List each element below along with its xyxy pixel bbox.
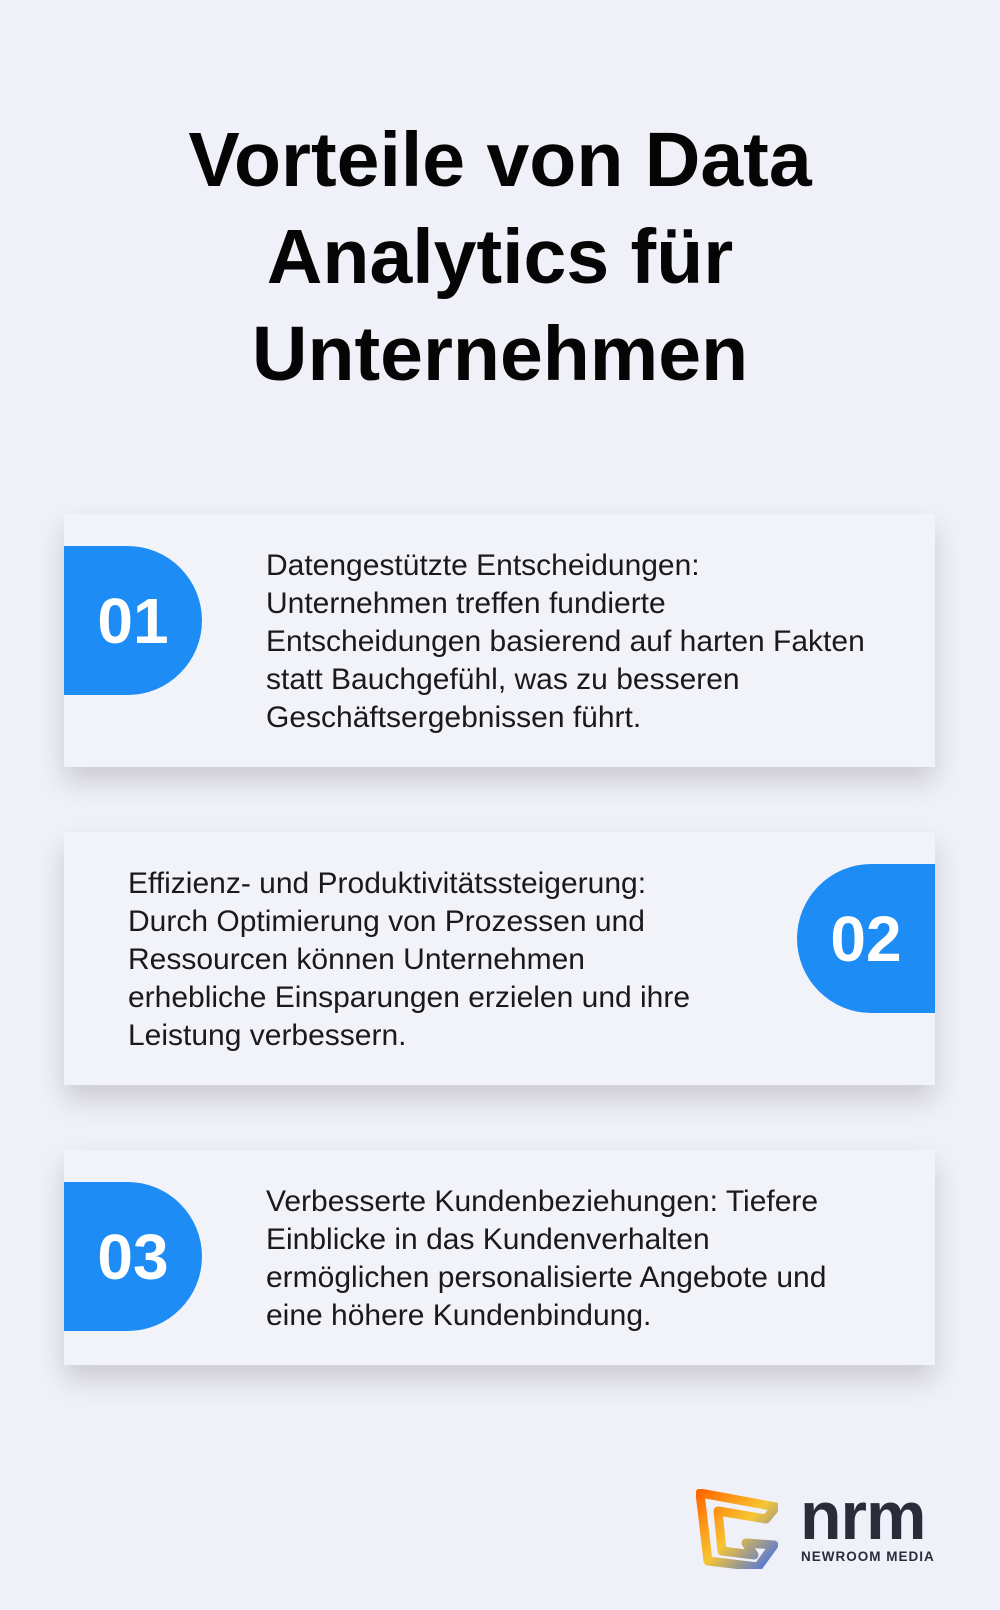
- text 02: Durch Optimierung von Prozessen und: [128, 905, 645, 938]
- title: Vorteile von Data: [188, 117, 812, 203]
- text 02: [128, 867, 690, 1052]
- badge 03: 03: [97, 1220, 169, 1292]
- badge 01: [64, 546, 202, 695]
- text 02: Effizienz- und Produktivitätssteigerung:: [128, 867, 646, 900]
- text 01: Geschäftsergebnissen führt.: [266, 701, 641, 734]
- panel: item 02: [64, 832, 935, 1085]
- panel: item 03: [64, 1150, 935, 1365]
- badge 01: 01: [97, 584, 169, 656]
- panel: item 01: [64, 514, 935, 767]
- text 03: [266, 1185, 826, 1332]
- text 02: Leistung verbessern.: [128, 1019, 406, 1052]
- title: Analytics für: [267, 214, 733, 300]
- badge 02: 02: [830, 902, 902, 974]
- text 03: ermöglichen personalisierte Angebote und: [266, 1261, 826, 1294]
- text 03: Verbesserte Kundenbeziehungen: Tiefere: [266, 1185, 818, 1218]
- text 01: [266, 549, 865, 734]
- text 01: Entscheidungen basierend auf harten Fakten: [266, 625, 865, 658]
- badge 03: [64, 1182, 202, 1331]
- text 03: eine höhere Kundenbindung.: [266, 1299, 651, 1332]
- icon: logo mark: [696, 1489, 778, 1569]
- text 01: Datengestützte Entscheidungen:: [266, 549, 700, 582]
- text 01: statt Bauchgefühl, was zu besseren: [266, 663, 740, 696]
- title: Unternehmen: [252, 311, 748, 397]
- badge 02: [797, 864, 935, 1013]
- text 01: Unternehmen treffen fundierte: [266, 587, 666, 620]
- text 02: Ressourcen können Unternehmen: [128, 943, 585, 976]
- logo: NEWROOM MEDIA: [801, 1549, 935, 1564]
- text 03: Einblicke in das Kundenverhalten: [266, 1223, 710, 1256]
- title: [188, 117, 812, 397]
- text 02: erhebliche Einsparungen erzielen und ihre: [128, 981, 690, 1014]
- logo: [696, 1478, 935, 1569]
- logo text: nrm: [800, 1478, 925, 1554]
